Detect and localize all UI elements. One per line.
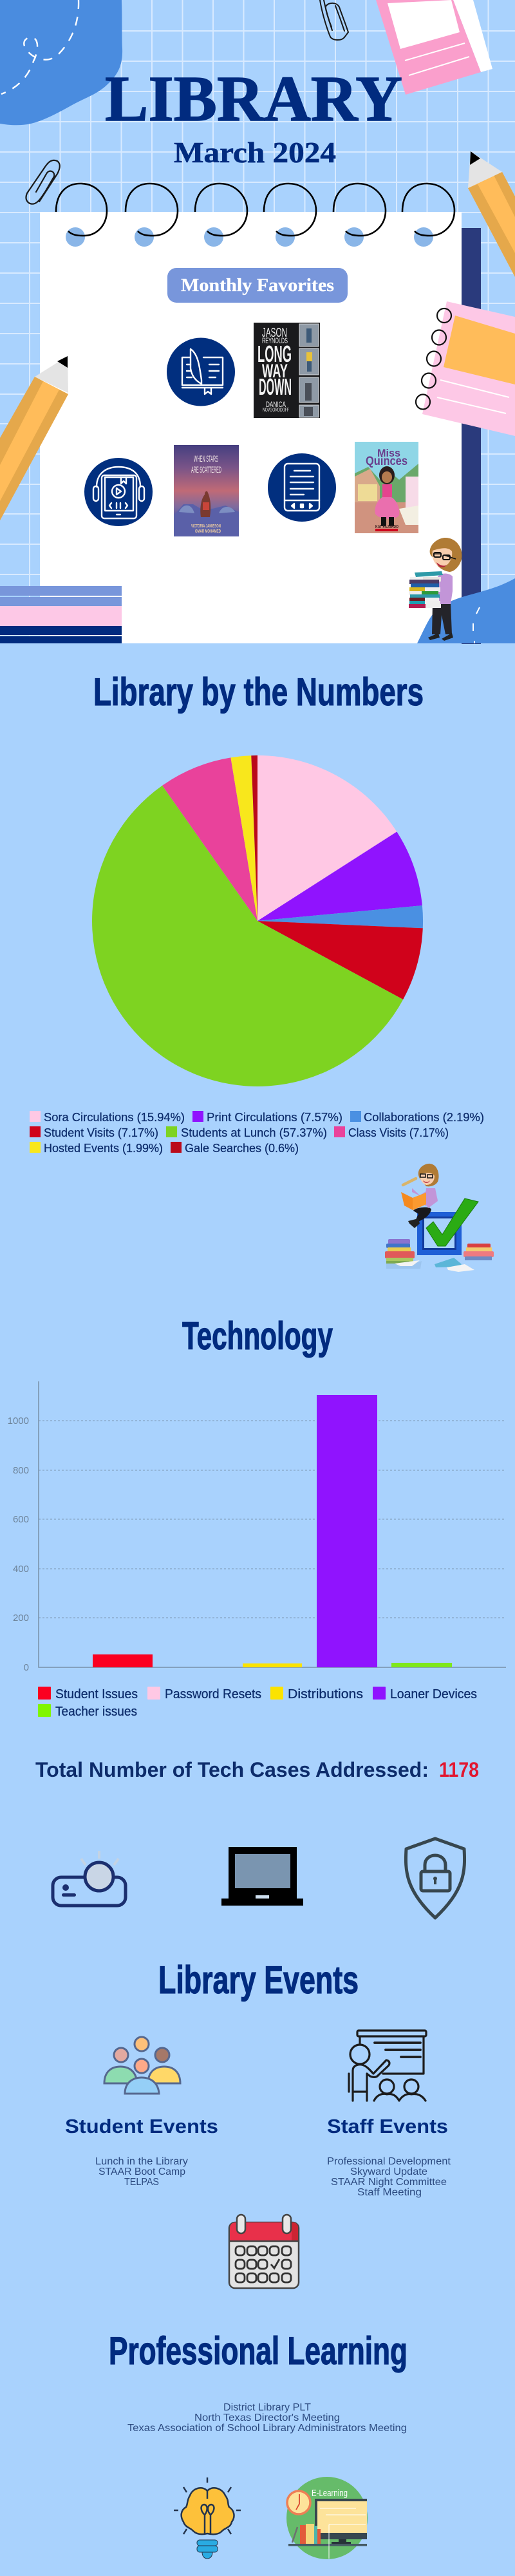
heading: Professional Learning: Professional Learning (109, 2329, 407, 2372)
book cover: Long Way Down: JASON (262, 326, 287, 340)
title: LIBRARY (105, 62, 402, 135)
pencil: left (0, 356, 68, 520)
sticky notes: pink with orange note (416, 301, 515, 436)
spiral binding rings and holes (56, 184, 454, 247)
panel: student events: Student Events (65, 2115, 218, 2137)
panel: student events: Lunch in the Library (95, 2156, 188, 2167)
total tech cases: 1178 (439, 1758, 479, 1781)
book cover: Long Way Down: WAY (262, 361, 288, 382)
blob: top-left corner with dashed path (0, 0, 122, 125)
blob: bottom-right corner (417, 578, 515, 643)
icon: projector (53, 1851, 126, 1906)
paperclip: left (26, 160, 60, 204)
bar chart: technology cases: 1000 (8, 1416, 29, 1426)
bar chart legend: Student Issues (55, 1687, 138, 1701)
pencil: right (468, 151, 515, 277)
bar chart legend (38, 1687, 477, 1719)
book cover: When Stars Are Scattered (174, 445, 239, 536)
pill: Monthly Favorites: Monthly Favorites (181, 276, 334, 296)
pie legend: Collaborations (2.19%) (364, 1111, 484, 1124)
panel: student events (65, 2115, 218, 2188)
panel: staff events: Skyward Update (350, 2166, 427, 2177)
book cover: Long Way Down: NOVGORODOFF (263, 407, 289, 413)
heading: Technology: Technology (182, 1314, 333, 1358)
text block: professional learning list: North Texas Director's Meeting (194, 2412, 340, 2423)
icon: e-learning: E-Learning (312, 2488, 348, 2499)
text block: professional learning list: District Library PLT (223, 2402, 312, 2413)
pill: Monthly Favorites (167, 268, 348, 303)
panel: staff events (327, 2115, 451, 2198)
bar chart legend: Teacher issues (55, 1705, 137, 1719)
book cover: When Stars Are Scattered: ARE SCATTERED (191, 464, 221, 475)
pie legend: Hosted Events (1.99%) (44, 1142, 163, 1155)
bar chart: technology cases: 800 (13, 1465, 29, 1476)
icon: calendar (229, 2215, 299, 2288)
text block: professional learning list: Texas Association of School Library Administrators Meeting (127, 2423, 407, 2434)
book: pink top-right (376, 0, 492, 95)
icon: audiobook tablet (84, 458, 153, 526)
icon: e-reader (268, 453, 336, 522)
pie legend: Students at Lunch (57.37%) (181, 1126, 327, 1139)
book cover: Long Way Down (254, 323, 320, 418)
icon: brain light bulb (174, 2477, 241, 2559)
notebook page (40, 212, 462, 643)
panel: staff events: STAAR Night Committee (331, 2177, 447, 2188)
icon: open book (167, 337, 235, 406)
book cover: Miss Quinces: Miss (377, 447, 400, 459)
stripes: stacked book spines (0, 586, 122, 643)
book cover: Miss Quinces: KAT FAJARDO (375, 525, 398, 529)
icon: security shield with lock (406, 1839, 465, 1918)
bar chart: technology cases (8, 1381, 506, 1673)
paperclip: top (320, 0, 348, 40)
pie legend: Student Visits (7.17%) (44, 1126, 158, 1139)
bar chart legend: Password Resets (165, 1687, 261, 1701)
avatar: librarian on checkmark box with books (385, 1164, 494, 1272)
icon: teacher at whiteboard (349, 2031, 426, 2101)
book cover: When Stars Are Scattered: VICTORIA JAMIESON (191, 524, 221, 529)
icon: group of students (104, 2037, 180, 2094)
bar chart legend: Loaner Devices (390, 1687, 477, 1701)
panel: staff events: Staff Meeting (357, 2187, 422, 2198)
bar chart: technology cases: 0 (24, 1662, 29, 1673)
panel: staff events: Staff Events (327, 2115, 448, 2137)
pie legend: Sora Circulations (15.94%) (44, 1111, 185, 1124)
navy backing strip (462, 228, 481, 644)
bar chart: technology cases: 200 (13, 1613, 29, 1624)
book cover: When Stars Are Scattered: WHEN STARS (194, 453, 218, 464)
pie legend (30, 1111, 484, 1155)
pie legend: Gale Searches (0.6%) (185, 1142, 299, 1155)
book cover: Long Way Down: DANICA (266, 400, 286, 409)
book cover: When Stars Are Scattered: OMAR MOHAMED (195, 529, 221, 534)
panel: student events: TELPAS (124, 2177, 159, 2188)
pie legend: Class Visits (7.17%) (348, 1126, 449, 1139)
book cover: Long Way Down: LONG (258, 341, 292, 367)
book cover: Long Way Down: REYNOLDS (262, 336, 288, 345)
heading: Library Events: Library Events (158, 1958, 359, 2002)
icon: e-learning (286, 2477, 368, 2559)
book cover: Miss Quinces (355, 442, 418, 533)
panel: student events: STAAR Boot Camp (98, 2166, 185, 2177)
book cover: Miss Quinces: Quinces (366, 455, 407, 468)
bar chart legend: Distributions (288, 1687, 363, 1701)
panel: staff events: Professional Development (327, 2156, 451, 2167)
bar chart: technology cases: 600 (13, 1514, 29, 1525)
pie legend: Print Circulations (7.57%) (207, 1111, 342, 1124)
text block: professional learning list (127, 2402, 407, 2434)
book cover: Long Way Down: DOWN (259, 374, 292, 400)
pie chart: library statistics (92, 755, 423, 1086)
heading: Library by the Numbers: Library by the Numbers (93, 670, 424, 714)
total tech cases: Total Number of Tech Cases Addressed: (35, 1758, 429, 1781)
bar chart: technology cases: 400 (13, 1564, 29, 1575)
icon: laptop (221, 1847, 303, 1906)
subtitle: date: March 2024 (174, 136, 336, 169)
avatar: librarian carrying books (409, 538, 462, 641)
